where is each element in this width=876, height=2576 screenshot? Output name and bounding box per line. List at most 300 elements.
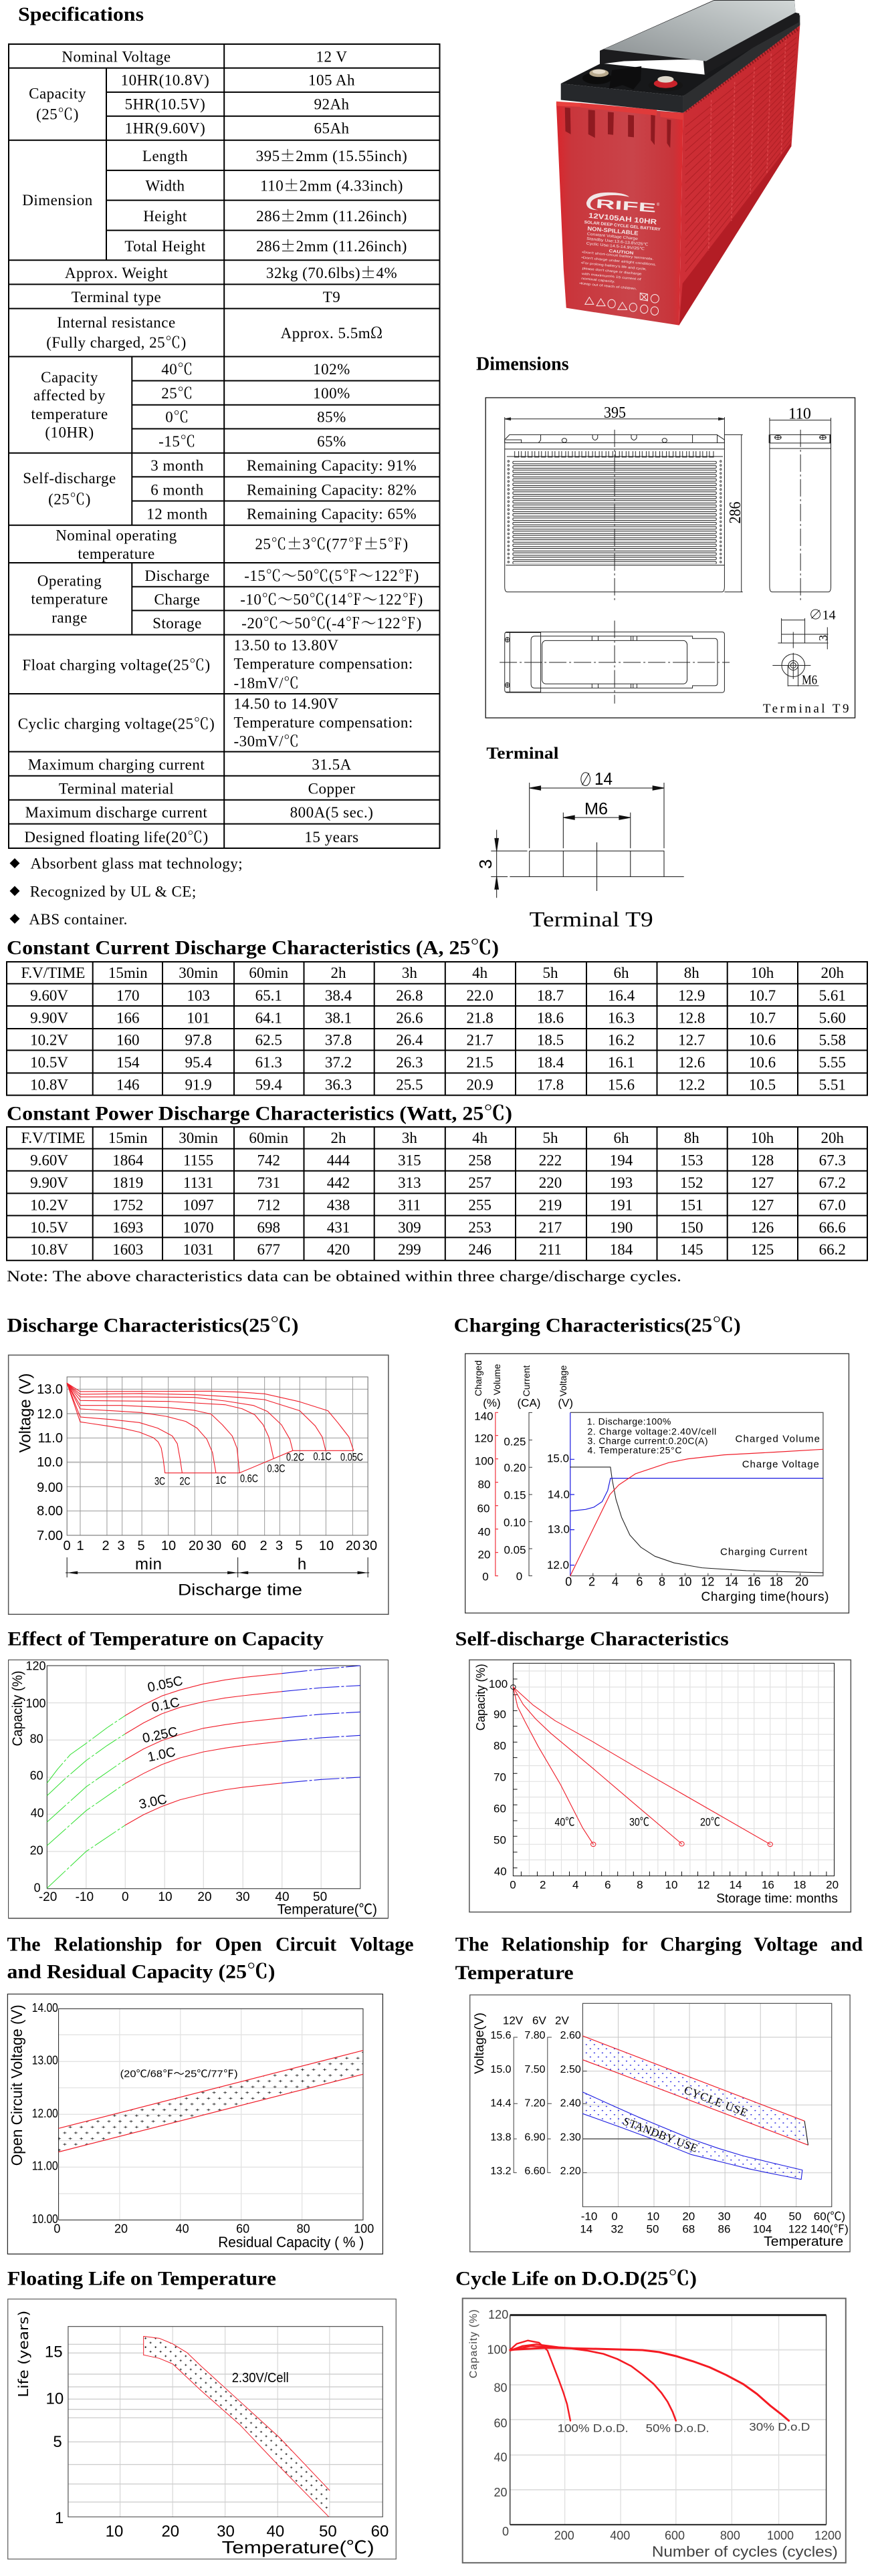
heading: discharge characteristics: Discharge Characteristics(25℃) xyxy=(7,1315,299,1337)
x axis labels: 6 xyxy=(605,1879,611,1892)
axis titles xyxy=(468,2309,838,2560)
feature bullet list xyxy=(9,856,243,928)
charged volume axis labels: 40 xyxy=(478,1525,490,1538)
spec rows: dimension: 286±2mm (11.26inch) xyxy=(256,234,407,256)
product photo: red battery xyxy=(556,0,800,326)
y axis labels: 13.0 xyxy=(37,1382,63,1397)
y axis labels: 10 xyxy=(46,2390,64,2408)
constant current discharge table: 10h xyxy=(751,964,774,981)
time axis labels: 8 xyxy=(659,1575,665,1589)
constant current discharge table: 10.5V xyxy=(30,1054,68,1071)
constant current discharge table: 154 xyxy=(116,1054,140,1071)
time axis labels: 16 xyxy=(748,1575,761,1589)
battery label text: NON-SPILLABLE xyxy=(587,225,639,237)
dimension labels: 110 xyxy=(788,405,811,422)
test conditions xyxy=(587,1416,716,1455)
voltage scale labels: 15.6 xyxy=(490,2030,512,2041)
current axis labels: 0.20 xyxy=(504,1462,526,1474)
battery logo: RIFE xyxy=(595,197,657,215)
constant power discharge table: 151 xyxy=(680,1196,703,1213)
spec rows: weight, terminal, resistance xyxy=(46,261,397,351)
x axis labels: 14 xyxy=(730,1879,742,1892)
constant current discharge table: 9.90V xyxy=(30,1009,68,1026)
constant power discharge table: 3h xyxy=(402,1130,417,1146)
spec rows: self-discharge: 6 month xyxy=(150,482,204,499)
x axis labels: 0 xyxy=(510,1879,516,1892)
constant power discharge table: 253 xyxy=(468,1219,491,1236)
discharge rate labels: 1.0C xyxy=(146,1745,177,1765)
battery label text: •Don't charge under airtight conditions. xyxy=(581,255,657,267)
constant current discharge table: 36.3 xyxy=(325,1076,352,1093)
band labels: STANDBY USE xyxy=(621,2115,699,2155)
x axis labels: 400 xyxy=(610,2529,630,2542)
temperature axis labels: 32 xyxy=(611,2223,623,2236)
test conditions: 1. Discharge:100% xyxy=(587,1416,671,1427)
x axis labels: 0 xyxy=(63,1539,71,1553)
constant power discharge table: 311 xyxy=(399,1196,421,1213)
y axis labels: 0 xyxy=(502,2525,509,2538)
constant power discharge table: 10h xyxy=(751,1130,774,1146)
axis titles: Life (years) xyxy=(15,2311,31,2398)
constant power discharge table: 60min xyxy=(249,1130,289,1146)
voltage system headings xyxy=(503,2014,569,2027)
axis titles: Temperature(℃) xyxy=(278,1902,377,1917)
x axis labels: 30 xyxy=(217,2523,235,2541)
heading: floating life on temperature: Floating Life on Temperature xyxy=(7,2267,276,2289)
spec rows: charging current, material, discharge current, life: Maximum discharge current xyxy=(25,804,207,821)
voltage scale labels: 2.20 xyxy=(560,2166,581,2177)
constant power discharge table: 438 xyxy=(327,1196,350,1213)
constant current discharge table: 21.7 xyxy=(466,1032,494,1049)
temperature axis labels: 14 xyxy=(580,2223,592,2236)
constant power discharge table: 150 xyxy=(680,1219,703,1236)
spec rows: capacity: 1HR(9.60V) xyxy=(125,120,205,136)
y axis labels: 40 xyxy=(31,1807,44,1820)
constant power discharge table: 420 xyxy=(327,1241,350,1258)
spec rows: charging current, material, discharge current, life: 15 years xyxy=(304,829,359,846)
battery label text: with maximum% 15 current of xyxy=(582,272,642,281)
heading: charging voltage relationship xyxy=(455,1933,863,1984)
spec rows: capacity: Capacity xyxy=(29,85,86,102)
constant current discharge table: F.V/TIME xyxy=(21,964,85,981)
spec rows: self-discharge: 3 month xyxy=(150,457,204,474)
spec rows: weight, terminal, resistance: 32kg (70.6lbs)±4% xyxy=(266,261,397,283)
constant power discharge table: 1603 xyxy=(112,1241,143,1258)
constant power discharge table: 698 xyxy=(257,1219,280,1236)
spec rows: cyclic charging voltage: Temperature compensation: xyxy=(234,714,413,731)
heading: open circuit voltage relationship: and Residual Capacity (25℃) xyxy=(7,1960,275,1982)
y axis labels: 12.00 xyxy=(32,2107,58,2120)
chart: discharge characteristics xyxy=(9,1355,389,1614)
current axis labels: 0.25 xyxy=(504,1435,526,1448)
spec rows: charging current, material, discharge current, life: Copper xyxy=(308,781,355,797)
discharge curves xyxy=(67,1383,354,1473)
temperature axis labels: 140(℉) xyxy=(810,2223,849,2236)
x axis labels: 100 xyxy=(354,2222,374,2236)
x axis labels: 40 xyxy=(267,2523,284,2541)
test conditions: 3. Charge current:0.20C(A) xyxy=(587,1436,707,1446)
spec rows: cyclic charging voltage: 14.50 to 14.90V xyxy=(234,695,338,712)
axis titles: Temperature xyxy=(764,2234,843,2249)
axis titles: Storage time: months xyxy=(716,1892,838,1906)
y axis labels: 80 xyxy=(494,2381,508,2394)
spec rows: nominal operating temperature: 25℃±3℃(77℉±5℉) xyxy=(255,531,409,553)
axis titles xyxy=(474,1664,838,1906)
constant power discharge table: 309 xyxy=(398,1219,421,1236)
spec rows: capacity affected by temperature: 100% xyxy=(313,385,350,402)
x axis labels: 1200 xyxy=(814,2529,841,2542)
constant power discharge table: 299 xyxy=(398,1241,421,1258)
constant power discharge table: 10.5V xyxy=(30,1219,68,1236)
constant current discharge table: 12.6 xyxy=(678,1054,705,1071)
discharge rate labels: 3.0C xyxy=(138,1792,169,1812)
axis titles: (%) xyxy=(483,1397,501,1409)
spec rows: self-discharge: Remaining Capacity: 65% xyxy=(247,505,417,522)
green low temperature extrapolation xyxy=(47,1716,125,1888)
spec rows: operating temperature range: Charge xyxy=(154,591,201,608)
x axis labels: 3 xyxy=(117,1539,125,1553)
curve rate labels: 0.6C xyxy=(240,1472,258,1485)
floating life band xyxy=(144,2336,330,2517)
time axis labels: 4 xyxy=(612,1575,619,1589)
constant current discharge table: 26.8 xyxy=(396,987,423,1004)
x axis labels: 20 xyxy=(189,1539,203,1553)
y axis labels: 60 xyxy=(494,1803,506,1815)
spec row: nominal voltage xyxy=(62,48,347,65)
y axis labels xyxy=(487,2308,509,2538)
constant power discharge table: 126 xyxy=(751,1219,774,1236)
y axis labels: 20 xyxy=(30,1843,43,1857)
spec rows: dimension: Width xyxy=(145,178,185,195)
chart: floating life vs temperature xyxy=(8,2299,396,2559)
x axis labels: 20 xyxy=(197,1890,212,1904)
axis titles xyxy=(473,2013,843,2249)
spec rows: self-discharge: Remaining Capacity: 91% xyxy=(247,457,417,474)
constant power discharge table: 222 xyxy=(539,1152,562,1169)
constant power discharge table: 217 xyxy=(539,1219,562,1236)
axis titles: Open Circuit Voltage (V) xyxy=(8,2005,25,2166)
constant current discharge table: 10.8V xyxy=(30,1076,68,1093)
y axis labels: 7.00 xyxy=(37,1529,63,1543)
charged volume axis labels: 100 xyxy=(475,1455,494,1468)
axis titles: (V) xyxy=(558,1397,573,1409)
small terminal detail xyxy=(772,618,829,686)
y axis labels: 13.00 xyxy=(32,2053,58,2067)
temperature axis labels: 68 xyxy=(682,2223,695,2236)
constant power discharge table: F.V/TIME xyxy=(21,1130,85,1146)
y axis labels: 5 xyxy=(53,2433,62,2451)
charged volume axis labels xyxy=(474,1410,494,1583)
constant current discharge table: 18.6 xyxy=(537,1009,564,1026)
constant current discharge table: 10.6 xyxy=(749,1054,776,1071)
constant power discharge table: 211 xyxy=(539,1241,562,1258)
x axis labels: -10 xyxy=(76,1890,94,1904)
y axis labels: 10.00 xyxy=(32,2212,58,2226)
y axis labels: 12.0 xyxy=(37,1407,63,1422)
constant power discharge table: 152 xyxy=(680,1174,703,1191)
time axis labels: 0 xyxy=(565,1575,572,1589)
spec rows: self-discharge: Remaining Capacity: 82% xyxy=(247,482,417,499)
dimension labels: ∅14 xyxy=(809,608,836,622)
constant current discharge table: 2h xyxy=(330,964,346,981)
x axis labels: 4 xyxy=(572,1879,578,1892)
axis titles: (CA) xyxy=(518,1397,540,1409)
x axis labels: 60 xyxy=(371,2523,389,2541)
constant power discharge table: 20h xyxy=(821,1130,845,1146)
feature bullet list: ABS container. xyxy=(29,911,128,928)
axis titles: Voltage xyxy=(558,1365,568,1396)
temperature labels: 20℃ xyxy=(700,1815,720,1828)
heading: self-discharge characteristics: Self-discharge Characteristics xyxy=(455,1628,729,1650)
time axis title: Charging time(hours) xyxy=(701,1590,829,1604)
constant power discharge table: 190 xyxy=(610,1219,633,1236)
voltage system headings: 2V xyxy=(555,2014,569,2027)
x axis labels: 20 xyxy=(346,1539,360,1553)
axis titles xyxy=(8,2005,364,2250)
constant current discharge table: 17.8 xyxy=(537,1076,564,1093)
voltage scale labels: 13.8 xyxy=(490,2132,512,2144)
constant power discharge table: 184 xyxy=(610,1241,633,1258)
red measured curves xyxy=(125,1674,282,1825)
specifications table xyxy=(8,43,440,849)
band labels xyxy=(621,2083,749,2155)
dimension labels: 3 xyxy=(816,635,830,641)
constant current discharge table: 10.6 xyxy=(749,1032,776,1049)
constant power discharge table: 2h xyxy=(330,1130,346,1146)
constant power discharge table: 315 xyxy=(398,1152,421,1169)
spec rows: operating temperature range: -15℃～50℃(5℉～122℉) xyxy=(244,567,419,584)
constant current discharge table: 10.2V xyxy=(30,1032,68,1049)
discharge rate labels: 0.05C xyxy=(146,1674,184,1695)
curve rate labels: 0.3C xyxy=(267,1462,285,1474)
spec rows: operating temperature range: -20℃～50℃(-4℉～122℉) xyxy=(241,615,422,632)
y axis labels: 80 xyxy=(30,1732,43,1746)
battery logo: ® xyxy=(657,203,660,207)
temperature axis labels: 122 xyxy=(788,2223,807,2236)
constant current discharge table: 16.1 xyxy=(608,1054,635,1071)
current axis labels: 0 xyxy=(516,1570,522,1583)
axis titles: Current xyxy=(521,1366,532,1396)
depth of discharge labels: 100% D.o.D. xyxy=(558,2422,629,2434)
constant current discharge table: 9.60V xyxy=(30,987,68,1004)
constant current discharge table: 5h xyxy=(543,964,558,981)
axis titles: Residual Capacity ( % ) xyxy=(218,2234,364,2250)
heading: open circuit voltage relationship xyxy=(7,1933,414,1982)
x axis labels: 60 xyxy=(231,1539,246,1553)
axis titles: Volume xyxy=(491,1364,502,1395)
constant current discharge table: 5.61 xyxy=(819,987,846,1004)
spec rows: cyclic charging voltage: Cyclic charging voltage(25℃) xyxy=(18,716,215,733)
constant current discharge table: 12.2 xyxy=(678,1076,705,1093)
depth of discharge labels: 50% D.o.D. xyxy=(646,2422,709,2434)
y axis labels: 100 xyxy=(489,1678,508,1690)
heading: effect of temperature on capacity: Effect of Temperature on Capacity xyxy=(7,1628,324,1650)
y axis labels: 40 xyxy=(494,1865,507,1878)
heading: charging characteristics: Charging Characteristics(25℃) xyxy=(454,1315,741,1337)
voltage axis labels: 12.0 xyxy=(547,1559,569,1571)
battery label text: Constant Voltage Charge xyxy=(587,232,638,241)
temperature axis labels: 20 xyxy=(682,2210,695,2223)
spec rows: float charging voltage: -18mV/℃ xyxy=(234,675,300,691)
constant power discharge table: 246 xyxy=(468,1241,491,1258)
charged volume axis labels: 20 xyxy=(478,1548,490,1561)
x axis labels: 40 xyxy=(176,2222,189,2236)
constant current discharge table: 91.9 xyxy=(185,1076,212,1093)
constant power discharge table: 1131 xyxy=(183,1174,213,1191)
constant current discharge table: 95.4 xyxy=(185,1054,212,1071)
constant power discharge table: 5h xyxy=(543,1130,558,1146)
temperature axis labels: 10 xyxy=(647,2210,659,2223)
x axis labels: 800 xyxy=(720,2529,740,2542)
terminal T9 diagram: Terminal T9 xyxy=(530,907,653,931)
x axis labels: 10 xyxy=(106,2523,123,2541)
curve rate labels: 0.2C xyxy=(286,1451,304,1464)
current axis labels: 0.15 xyxy=(504,1489,526,1502)
constant power discharge table: 9.90V xyxy=(30,1174,68,1191)
spec rows: charging current, material, discharge current, life: Terminal material xyxy=(59,781,174,797)
y axis labels: 120 xyxy=(25,1659,46,1672)
spec rows: operating temperature range: Operating xyxy=(37,572,102,589)
y axis labels: 60 xyxy=(494,2417,508,2430)
constant power discharge table: 67.0 xyxy=(819,1196,846,1213)
30 degree curve xyxy=(513,1687,681,1844)
constant power discharge table: 1864 xyxy=(112,1152,144,1169)
30 percent DOD curve xyxy=(510,2348,789,2421)
constant current discharge table: 5.51 xyxy=(819,1076,846,1093)
y axis labels: 0 xyxy=(34,1881,41,1894)
spec rows: capacity affected by temperature: 0℃ xyxy=(165,409,189,426)
spec rows: capacity affected by temperature: (10HR) xyxy=(45,424,94,441)
battery label text xyxy=(579,212,661,292)
spec row: nominal voltage: 12 V xyxy=(316,48,347,65)
band labels: CYCLE USE xyxy=(682,2083,749,2119)
temperature axis labels: 30 xyxy=(718,2210,730,2223)
spec rows: self-discharge: 12 month xyxy=(146,505,208,522)
axis titles: Capacity (%) xyxy=(468,2309,479,2378)
constant power discharge table: 220 xyxy=(539,1174,562,1191)
constant current discharge table: 26.3 xyxy=(396,1054,423,1071)
x axis labels: 30 xyxy=(207,1539,221,1553)
spec rows: capacity affected by temperature: Capacity xyxy=(41,369,98,386)
constant current discharge table xyxy=(6,961,868,1096)
spec rows: float charging voltage xyxy=(22,637,413,691)
constant current discharge table: 30min xyxy=(179,964,218,981)
x axis labels: 20 xyxy=(826,1879,839,1892)
voltage axis labels xyxy=(547,1452,570,1571)
constant current discharge table: 12.7 xyxy=(678,1032,705,1049)
time axis labels: 6 xyxy=(636,1575,643,1589)
y axis labels: 60 xyxy=(30,1769,43,1783)
constant power discharge table: 442 xyxy=(327,1174,350,1191)
x axis labels: 600 xyxy=(665,2529,685,2542)
axis titles: Voltage(V) xyxy=(473,2013,487,2074)
constant current discharge table: 170 xyxy=(116,987,140,1004)
spec rows: capacity: 5HR(10.5V) xyxy=(125,96,205,112)
spec rows: cyclic charging voltage xyxy=(18,695,413,750)
depth of discharge labels: 30% D.o.D xyxy=(749,2421,810,2434)
y axis labels xyxy=(489,1678,508,1878)
spec rows: self-discharge: Self-discharge xyxy=(23,470,116,487)
spec rows: dimension: Total Height xyxy=(124,238,206,255)
axis titles xyxy=(473,1360,573,1409)
spec rows: weight, terminal, resistance: Internal resistance xyxy=(57,314,176,331)
time axis labels: 2 xyxy=(588,1575,595,1589)
spec rows: operating temperature range: range xyxy=(51,609,88,626)
constant current discharge table: 65.1 xyxy=(255,987,282,1004)
charged volume axis labels: 120 xyxy=(474,1432,494,1444)
temperature axis labels xyxy=(580,2210,849,2236)
time axis labels: 10 xyxy=(678,1575,691,1589)
constant power discharge table: 128 xyxy=(751,1152,774,1169)
axis titles: Number of cycles (cycles) xyxy=(652,2543,838,2560)
curve rate labels: 0.05C xyxy=(340,1451,363,1464)
voltage scale labels: 2.40 xyxy=(560,2098,581,2109)
curve names xyxy=(720,1434,820,1558)
spec rows: float charging voltage: Float charging voltage(25℃) xyxy=(22,657,211,674)
time axis labels: 20 xyxy=(795,1575,808,1589)
heading: charging voltage relationship: Temperature xyxy=(455,1962,574,1984)
battery label text: 12V105AH 10HR xyxy=(588,212,657,227)
spec rows: cyclic charging voltage: -30mV/℃ xyxy=(234,733,300,750)
spec rows: dimension: 395±2mm (15.55inch) xyxy=(256,144,407,166)
constant power discharge table: 9.60V xyxy=(30,1152,68,1169)
charge voltage curve xyxy=(570,1478,823,1511)
discharge rate labels: 0.1C xyxy=(150,1695,181,1715)
spec rows: operating temperature range: Discharge xyxy=(144,567,210,584)
dimension labels xyxy=(604,404,849,716)
constant power discharge table: 255 xyxy=(468,1196,491,1213)
constant power discharge table: 145 xyxy=(680,1241,703,1258)
spec rows: capacity affected by temperature xyxy=(31,361,350,450)
constant current discharge table: 160 xyxy=(116,1032,140,1049)
constant power discharge table: 257 xyxy=(468,1174,491,1191)
spec rows: capacity affected by temperature: 40℃ xyxy=(161,361,193,378)
temperature axis labels: 0 xyxy=(611,2210,618,2223)
axis titles: Charged xyxy=(473,1360,483,1396)
voltage scale labels: 6.60 xyxy=(524,2166,546,2177)
constant current discharge table: 12.8 xyxy=(678,1009,705,1026)
title: Specifications: Specifications xyxy=(18,3,144,25)
spec rows: charging current, material, discharge current, life: 31.5A xyxy=(312,756,352,773)
top view of battery xyxy=(500,621,730,704)
constant current discharge table: 62.5 xyxy=(255,1032,282,1049)
temperature axis labels: 60(℃) xyxy=(814,2210,845,2223)
curve end markers xyxy=(511,1685,772,1847)
constant current discharge table: 8h xyxy=(684,964,699,981)
battery label text: •Keep out of reach of children. xyxy=(579,281,637,291)
spec rows: nominal operating temperature: temperature xyxy=(78,545,155,562)
axis titles xyxy=(16,1373,306,1599)
y axis labels: 100 xyxy=(487,2343,508,2357)
20 degree curve xyxy=(513,1687,770,1844)
x axis labels: 2 xyxy=(102,1539,110,1553)
feature bullet list: Recognized by UL & CE; xyxy=(30,884,197,900)
axis titles: Voltage (V) xyxy=(16,1374,35,1452)
constant current discharge table: 5.55 xyxy=(819,1054,846,1071)
y axis labels xyxy=(45,2343,64,2527)
constant current discharge table: 97.8 xyxy=(185,1032,212,1049)
temperature axis labels: 40 xyxy=(754,2210,766,2223)
charged volume curve xyxy=(570,1449,823,1576)
temperature axis labels: 86 xyxy=(718,2223,730,2236)
constant power discharge table: 125 xyxy=(751,1241,774,1258)
battery label text: •Don't short-circuit battery terminals. xyxy=(582,250,654,261)
feature bullet list: Absorbent glass mat technology; xyxy=(31,856,243,872)
constant power discharge table: 4h xyxy=(472,1130,488,1146)
constant power discharge table: 742 xyxy=(257,1152,280,1169)
spec rows: charging current, material, discharge current, life: 800A(5 sec.) xyxy=(290,804,373,821)
terminal T9 diagram: M6 xyxy=(584,800,608,819)
